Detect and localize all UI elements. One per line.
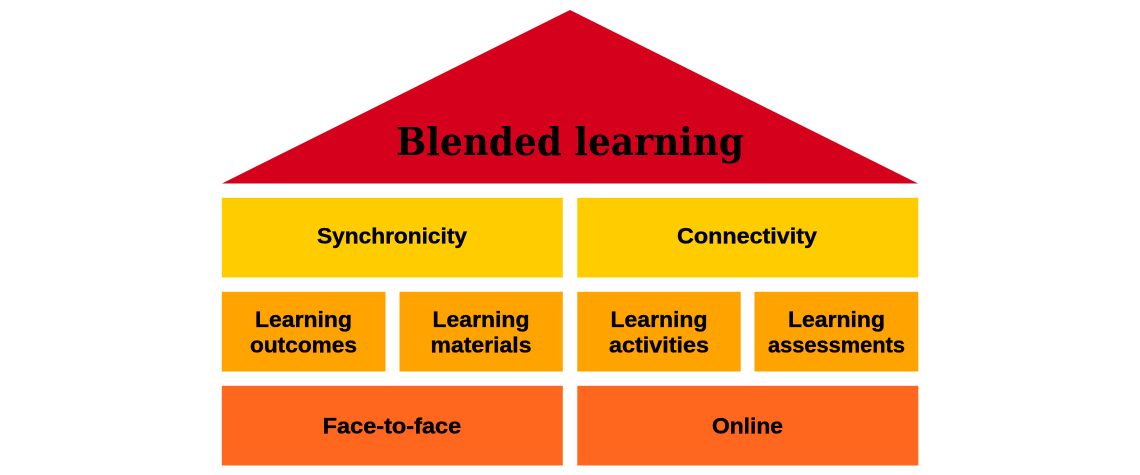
box: Learning outcomes: outcomes <box>250 332 357 358</box>
box: Synchronicity <box>222 198 563 278</box>
box: Synchronicity: Synchronicity <box>317 224 468 248</box>
roof: Blended learning <box>222 10 918 184</box>
box: Learning activities: Learning <box>610 307 708 332</box>
box: Connectivity <box>577 198 918 278</box>
box: Learning assessments <box>754 292 918 372</box>
box: Learning activities <box>577 292 741 372</box>
box: Learning materials <box>400 292 563 372</box>
box: Learning outcomes <box>222 292 386 372</box>
box: Learning assessments: assessments <box>768 332 905 358</box>
box: Online <box>577 386 918 466</box>
box: Learning materials: Learning <box>432 307 530 332</box>
box: Face-to-face <box>222 386 563 466</box>
box: Face-to-face: Face-to-face <box>323 414 461 438</box>
box: Learning materials: materials <box>430 332 532 358</box>
title: Blended learning <box>396 120 744 165</box>
box: Learning activities: activities <box>609 332 709 358</box>
box: Learning assessments: Learning <box>788 307 885 332</box>
box: Learning outcomes: Learning <box>255 307 352 332</box>
box: Online: Online <box>712 414 783 438</box>
box: Connectivity: Connectivity <box>677 224 818 248</box>
